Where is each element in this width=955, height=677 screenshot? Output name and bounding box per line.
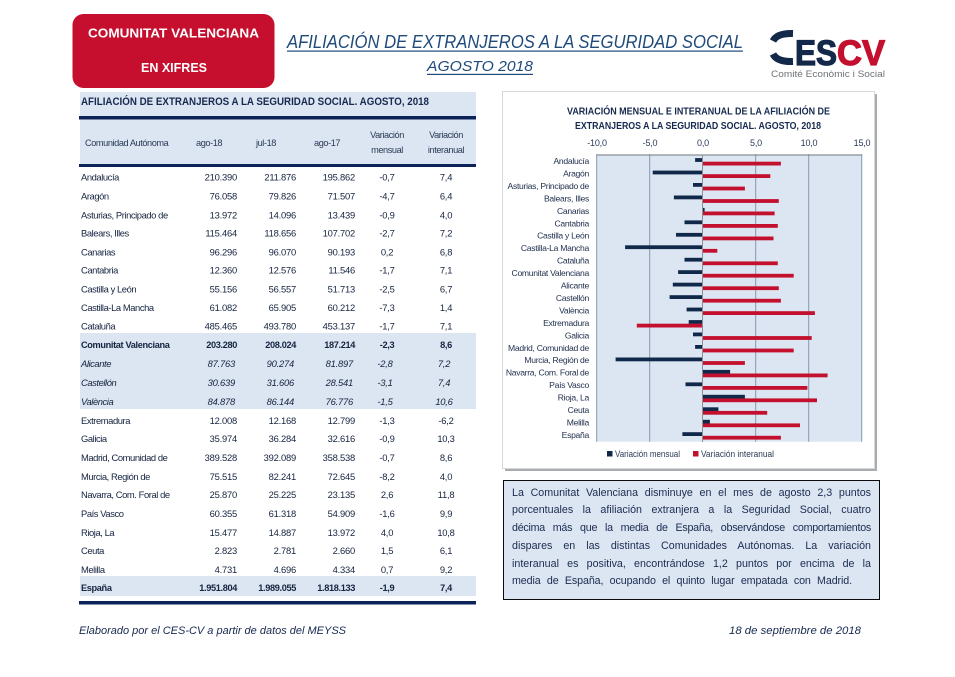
row: Madrid: 389.528: [205, 452, 237, 463]
row: València: 10,6: [435, 396, 454, 407]
row: Castilla y León: [81, 284, 452, 294]
table header row: Variación: [429, 130, 463, 140]
row: Comunitat Valenciana: 8,6: [440, 340, 452, 350]
row: Castilla-La Mancha: 1,4: [440, 302, 452, 313]
category labels: País Vasco: [549, 380, 590, 390]
commentary text box: décima más que la media de España, observándose comportamientos: [512, 522, 871, 534]
category labels: Comunitat Valenciana: [512, 268, 590, 278]
commentary text box: porcentuales la afiliación extranjera a la Seguridad Social, cuatro: [512, 504, 871, 516]
row: Murcia: [81, 471, 452, 482]
table title: AFILIACIÓN DE EXTRANJEROS A LA SEGURIDAD SOCIAL. AGOSTO, 2018: [81, 95, 429, 108]
row: Comunitat Valenciana: Comunitat Valenciana: [81, 340, 171, 350]
row: Castellón: Castellón: [81, 377, 117, 388]
table header row: Comunidad Autónoma: [85, 138, 170, 148]
row: Madrid: [81, 452, 452, 463]
row: Andalucía: 195.862: [323, 172, 355, 182]
row: País Vasco: País Vasco: [81, 508, 124, 519]
commentary text box: [503, 480, 880, 600]
row: País Vasco: 61.318: [269, 508, 296, 519]
row: Castilla y León: 55.156: [210, 284, 237, 294]
category labels: Castilla-La Mancha: [521, 243, 590, 253]
badge: Comunitat Valenciana en xifres: COMUNITAT VALENCIANA: [88, 26, 260, 40]
row: España: España: [81, 583, 113, 593]
row: Murcia: 4,0: [440, 471, 452, 482]
logo: CES CV: [771, 33, 886, 80]
row: Comunitat Valenciana: [81, 340, 452, 350]
row: Balears: 107.702: [323, 228, 355, 238]
footer: date: 18 de septiembre de 2018: [729, 625, 862, 637]
chart legend: Variación mensual: [615, 449, 680, 459]
row: Cataluña: 453.137: [323, 320, 355, 332]
row: Melilla: [81, 564, 452, 575]
table header row: interanual: [428, 145, 464, 155]
row: Cataluña: 7,1: [440, 320, 452, 332]
row: Aragón: 79.826: [269, 190, 296, 202]
table header row: jul-18: [255, 138, 276, 148]
row: Castellón: 7,4: [438, 377, 450, 388]
row: Navarra: 2,6: [381, 489, 393, 500]
row: Asturias: 13.972: [210, 210, 237, 220]
row: España: 1.951.804: [199, 583, 238, 593]
row: Rioja: 13.972: [328, 527, 355, 538]
row: Castellón: 30.639: [208, 377, 236, 388]
row: Extremadura: -1,3: [379, 415, 395, 426]
row: Galicia: 32.616: [328, 433, 355, 444]
row: Galicia: 36.284: [269, 433, 296, 444]
row: Melilla: Melilla: [81, 564, 106, 575]
row: Balears: Balears, Illes: [81, 228, 130, 238]
row: Castilla y León: -2,5: [379, 284, 395, 294]
row: Andalucía: 7,4: [440, 172, 452, 182]
row: Castellón: 31.606: [267, 377, 295, 388]
row: Cantabria: 12.576: [269, 264, 296, 276]
row: Asturias: -0,9: [379, 210, 395, 220]
logo: CES CV: Comité Econòmic i Social: [771, 69, 885, 80]
row: Cataluña: [81, 320, 452, 332]
badge: Comunitat Valenciana en xifres: [72, 14, 274, 88]
row: Cantabria: 12.360: [210, 264, 237, 276]
bars: variación interanual: [637, 162, 828, 440]
category labels: Castellón: [556, 293, 590, 303]
row: País Vasco: [81, 508, 452, 519]
row: Canarias: 90.193: [328, 246, 355, 258]
chart legend: Variación interanual: [701, 449, 774, 459]
bars: variación mensual: [616, 158, 745, 436]
row: Rioja: 4,0: [381, 527, 393, 538]
axis values: -5,0: [643, 138, 658, 148]
row: Cataluña: 493.780: [264, 320, 296, 332]
row: Galicia: 10,3: [437, 433, 455, 444]
row: Castilla y León: Castilla y León: [81, 284, 136, 294]
commentary text box: dispares en las distintas Comunidades Autónomas. La variación: [512, 540, 871, 552]
row: Navarra: 23.135: [328, 489, 355, 500]
row: Comunitat Valenciana: 208.024: [265, 340, 297, 350]
main title: AFILIACIÓN DE EXTRANJEROS A LA SEGURIDAD SOCIAL: [286, 31, 743, 52]
table panel: afiliación por comunidad autónoma: [79, 92, 476, 604]
chart panel: variación mensual e interanual: [502, 92, 877, 471]
row: Castilla-La Mancha: 60.212: [328, 302, 355, 313]
row: Andalucía: 211.876: [264, 172, 296, 182]
row: Asturias: 14.096: [269, 210, 296, 220]
row: Balears: 115.464: [205, 228, 237, 238]
category labels: Cantabria: [554, 218, 590, 228]
row: Andalucía: -0,7: [379, 172, 395, 182]
chart legend: [607, 449, 774, 459]
row: Asturias: 13.439: [328, 210, 355, 220]
row: España: 1.818.133: [317, 583, 355, 593]
category labels: Balears, Illes: [544, 193, 589, 203]
footer: source: Elaborado por el CES-CV a partir de datos del MEYSS: [79, 625, 347, 637]
main title: [286, 31, 743, 75]
axis values: 0,0: [697, 138, 709, 148]
category labels: Canarias: [557, 206, 589, 216]
row: Cataluña: Cataluña: [81, 320, 116, 332]
row: València: -1,5: [377, 396, 394, 407]
row: Balears: 7,2: [440, 228, 452, 238]
row: Melilla: 4.334: [333, 564, 355, 575]
table header row: Variación: [370, 130, 404, 140]
row: Castellón: [81, 377, 450, 388]
category labels: Melilla: [567, 418, 590, 428]
category labels: Galicia: [565, 330, 590, 340]
category labels: Castilla y León: [537, 231, 590, 241]
row: Ceuta: 2.823: [215, 545, 237, 556]
row: Aragón: 71.507: [328, 190, 355, 202]
row: Ceuta: 1,5: [381, 545, 393, 556]
row: Madrid: 392.089: [264, 452, 296, 463]
row: Navarra: [81, 489, 454, 500]
row: Castilla-La Mancha: 65.905: [269, 302, 296, 313]
row: Alicante: -2,8: [377, 358, 394, 369]
row: Madrid: -0,7: [379, 452, 395, 463]
axis values: 10,0: [801, 138, 818, 148]
row: País Vasco: -1,6: [379, 508, 395, 519]
row: Rioja: 15.477: [210, 527, 237, 538]
row: Navarra: 25.870: [210, 489, 237, 500]
row: Cantabria: [81, 264, 452, 276]
row: Alicante: 7,2: [438, 358, 451, 369]
row: València: 84.878: [208, 396, 236, 407]
category labels: València: [559, 305, 590, 315]
row: Cantabria: 11.546: [328, 264, 355, 276]
row: Asturias: [81, 210, 452, 220]
row: Extremadura: 12.799: [328, 415, 355, 426]
row: Castilla-La Mancha: -7,3: [379, 302, 395, 313]
row: Ceuta: 6,1: [440, 545, 452, 556]
row: Madrid: 358.538: [323, 452, 355, 463]
row: València: València: [81, 396, 113, 407]
row: Extremadura: [81, 415, 454, 426]
row: Galicia: [81, 433, 455, 444]
row: València: 76.776: [326, 396, 354, 407]
main title: AGOSTO 2018: [426, 58, 534, 75]
category labels: Cataluña: [557, 256, 590, 266]
row: Rioja: 10,8: [437, 527, 455, 538]
row: Galicia: 35.974: [210, 433, 237, 444]
row: Melilla: 0,7: [381, 564, 393, 575]
category labels: España: [562, 430, 590, 440]
axis values: 5,0: [750, 138, 762, 148]
row: Extremadura: 12.008: [210, 415, 237, 426]
row: Alicante: 90.274: [267, 358, 294, 369]
category labels: [506, 156, 590, 440]
row: España: 7,4: [440, 583, 453, 593]
commentary text box: interanual es positiva, encontrándose 1,2 puntos por encima de la: [512, 558, 871, 570]
row: Cantabria: -1,7: [379, 264, 395, 276]
row: Cantabria: Cantabria: [81, 264, 119, 276]
commentary text box: La Comunitat Valenciana disminuye en el mes de agosto 2,3 puntos: [512, 486, 871, 498]
row: Andalucía: [81, 172, 452, 182]
row: España: 1.989.055: [258, 583, 296, 593]
table header row: [85, 130, 464, 155]
table header row: mensual: [371, 145, 403, 155]
row: Alicante: [80, 358, 451, 369]
row: Aragón: 76.058: [210, 190, 237, 202]
axis values: [587, 138, 871, 148]
row: Comunitat Valenciana: 187.214: [324, 340, 356, 350]
row: Balears: [81, 228, 452, 238]
category labels: Aragón: [563, 168, 590, 178]
row: València: 86.144: [267, 396, 294, 407]
chart title: [567, 104, 830, 132]
chart title: VARIACIÓN MENSUAL E INTERANUAL DE LA AFILIACIÓN DE: [567, 104, 830, 118]
row: Aragón: Aragón: [81, 190, 109, 202]
axis values: 15,0: [854, 138, 871, 148]
row: Madrid: 8,6: [440, 452, 452, 463]
category labels: Asturias, Principado de: [508, 181, 590, 191]
row: Canarias: 96.296: [210, 246, 237, 258]
row: Murcia: Murcia, Región de: [81, 471, 150, 482]
row: Alicante: 87.763: [208, 358, 236, 369]
row: Galicia: -0,9: [379, 433, 395, 444]
row: Galicia: Galicia: [81, 433, 108, 444]
category labels: Andalucía: [553, 156, 590, 166]
row: Canarias: 0,2: [381, 246, 393, 258]
row: Rioja: [81, 527, 455, 538]
row: Murcia: 75.515: [210, 471, 237, 482]
row: Cataluña: 485.465: [205, 320, 237, 332]
row: España: -1,9: [380, 583, 394, 593]
row: Castilla-La Mancha: [81, 302, 452, 313]
table header row: ago-17: [314, 138, 340, 148]
row: Rioja: Rioja, La: [81, 527, 115, 538]
category labels: Extremadura: [543, 318, 590, 328]
category labels: Navarra, Com. Foral de: [506, 368, 590, 378]
row: Castilla-La Mancha: 61.082: [210, 302, 237, 313]
row: Comunitat Valenciana: 203.280: [206, 340, 237, 350]
row: País Vasco: 54.909: [328, 508, 355, 519]
row: España: [81, 583, 453, 593]
row: Navarra: Navarra, Com. Foral de: [81, 489, 170, 500]
row: Extremadura: Extremadura: [81, 415, 131, 426]
row: Canarias: 6,8: [440, 246, 452, 258]
row: País Vasco: 60.355: [210, 508, 237, 519]
category labels: Rioja, La: [558, 393, 590, 403]
row: Murcia: 82.241: [269, 471, 296, 482]
row: Castilla y León: 6,7: [440, 284, 452, 294]
row: Balears: 118.656: [264, 228, 296, 238]
row: Asturias: 4,0: [440, 210, 452, 220]
category labels: Madrid, Comunidad de: [508, 343, 590, 353]
row: Asturias: Asturias, Principado de: [81, 210, 168, 220]
row: Extremadura: -6,2: [438, 415, 454, 426]
axis values: -10,0: [587, 138, 607, 148]
row: València: [81, 396, 454, 407]
row: Aragón: [81, 190, 452, 202]
row: Ceuta: 2.660: [333, 545, 355, 556]
row: Madrid: Madrid, Comunidad de: [81, 452, 168, 463]
logo: CES CV: ES: [795, 34, 837, 73]
row: Ceuta: Ceuta: [81, 545, 105, 556]
row: Andalucía: Andalucía: [81, 172, 120, 182]
category labels: Ceuta: [568, 405, 590, 415]
logo: CES CV: CV: [837, 34, 886, 73]
category labels: Alicante: [561, 280, 590, 290]
chart title: EXTRANJEROS A LA SEGURIDAD SOCIAL. AGOSTO, 2018: [575, 121, 821, 132]
row: Canarias: [81, 246, 452, 258]
category labels: Murcia, Región de: [524, 355, 590, 365]
row: Canarias: 96.070: [269, 246, 296, 258]
row: Aragón: -4,7: [379, 190, 395, 202]
row: Andalucía: 210.390: [205, 172, 237, 182]
row: Balears: -2,7: [379, 228, 395, 238]
row: Rioja: 14.887: [269, 527, 296, 538]
row: Castellón: 28.541: [325, 377, 353, 388]
row: Ceuta: [81, 545, 452, 556]
row: Melilla: 4.696: [274, 564, 296, 575]
row: Castilla y León: 56.557: [269, 284, 296, 294]
row: Alicante: 81.897: [326, 358, 354, 369]
row: País Vasco: 9,9: [440, 508, 452, 519]
row: Navarra: 25.225: [269, 489, 296, 500]
row: Comunitat Valenciana: -2,3: [380, 340, 394, 350]
row: Ceuta: 2.781: [274, 545, 296, 556]
table header row: ago-18: [196, 138, 222, 148]
row: Castilla y León: 51.713: [328, 284, 355, 294]
row: Melilla: 4.731: [215, 564, 237, 575]
row: Murcia: 72.645: [328, 471, 355, 482]
row: Canarias: Canarias: [81, 246, 116, 258]
row: Murcia: -8,2: [379, 471, 395, 482]
badge: Comunitat Valenciana en xifres: EN XIFRES: [141, 60, 207, 75]
row: Melilla: 9,2: [440, 564, 452, 575]
commentary text box: media de España, ocupando el quinto lugar empatada con Madrid.: [512, 575, 852, 587]
row: Cataluña: -1,7: [379, 320, 395, 332]
row: Aragón: 6,4: [440, 190, 452, 202]
row: Navarra: 11,8: [438, 489, 454, 500]
row: Extremadura: 12.168: [269, 415, 296, 426]
row: Cantabria: 7,1: [440, 264, 452, 276]
row: Castilla-La Mancha: Castilla-La Mancha: [81, 302, 155, 313]
row: Castellón: -3,1: [377, 377, 393, 388]
row: Alicante: Alicante: [80, 358, 111, 369]
